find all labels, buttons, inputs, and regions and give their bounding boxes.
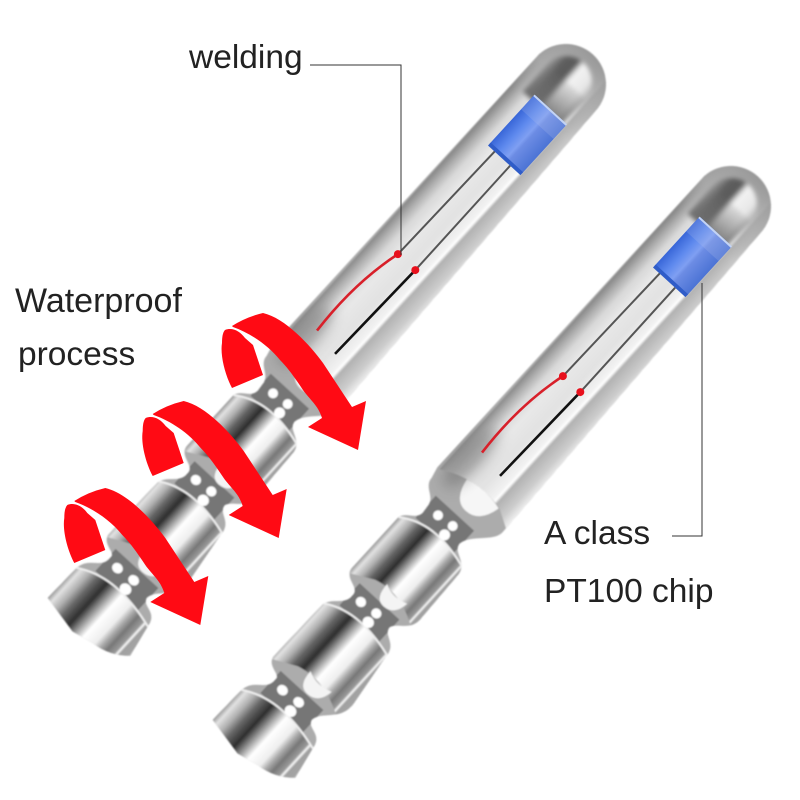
right probe blue chip <box>653 217 732 297</box>
label: Waterproof: Waterproof <box>15 282 182 320</box>
left probe wires <box>313 143 514 358</box>
label: welding: welding <box>188 39 303 76</box>
label: A class: A class <box>544 515 650 552</box>
arrow: bottom red spiral <box>64 488 208 625</box>
welding leader line <box>310 65 401 255</box>
arrow: top red spiral <box>222 313 366 450</box>
label: process: process <box>18 336 135 373</box>
right probe wires <box>478 265 679 480</box>
left probe blue chip <box>488 95 567 175</box>
arrow: middle red spiral <box>142 401 287 538</box>
chip leader line <box>672 283 702 536</box>
right probe <box>178 135 800 800</box>
label: PT100 chip: PT100 chip <box>544 573 713 610</box>
left probe <box>13 13 651 695</box>
